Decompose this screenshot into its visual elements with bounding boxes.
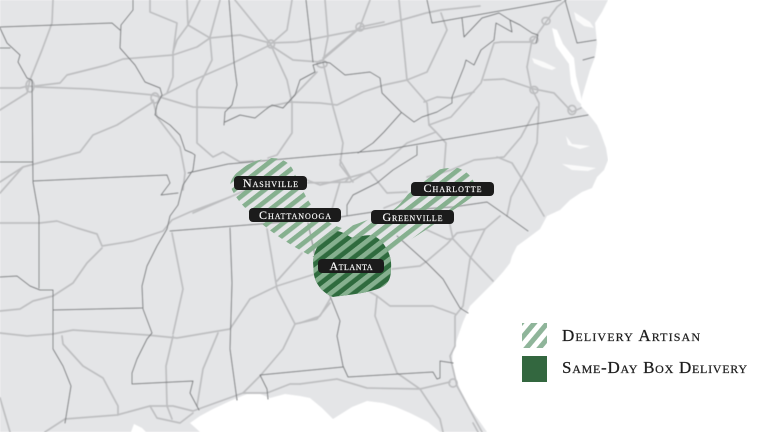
state borders (0, 0, 596, 423)
city label: Atlanta: Atlanta (330, 259, 373, 273)
region: Same-Day Box Delivery coverage (313, 231, 391, 297)
legend swatch: Same-Day Box Delivery (522, 356, 547, 382)
legend label: Same-Day Box Delivery: Same-Day Box Delivery (562, 358, 747, 377)
city label: Atlanta (318, 259, 384, 273)
city label: Greenville: Greenville (382, 210, 443, 224)
legend swatch: Delivery Artisan (522, 323, 547, 348)
base map (0, 0, 608, 432)
region: Delivery Artisan coverage (230, 158, 476, 262)
legend label: Delivery Artisan: Delivery Artisan (562, 326, 700, 345)
legend (522, 323, 747, 382)
city label: Charlotte (411, 181, 494, 196)
city label: Chattanooga: Chattanooga (259, 208, 331, 222)
city label: Nashville: Nashville (243, 176, 298, 190)
city label: Charlotte: Charlotte (424, 181, 482, 195)
highways (0, 0, 581, 432)
water inlets (131, 12, 596, 432)
land mass (0, 0, 608, 432)
